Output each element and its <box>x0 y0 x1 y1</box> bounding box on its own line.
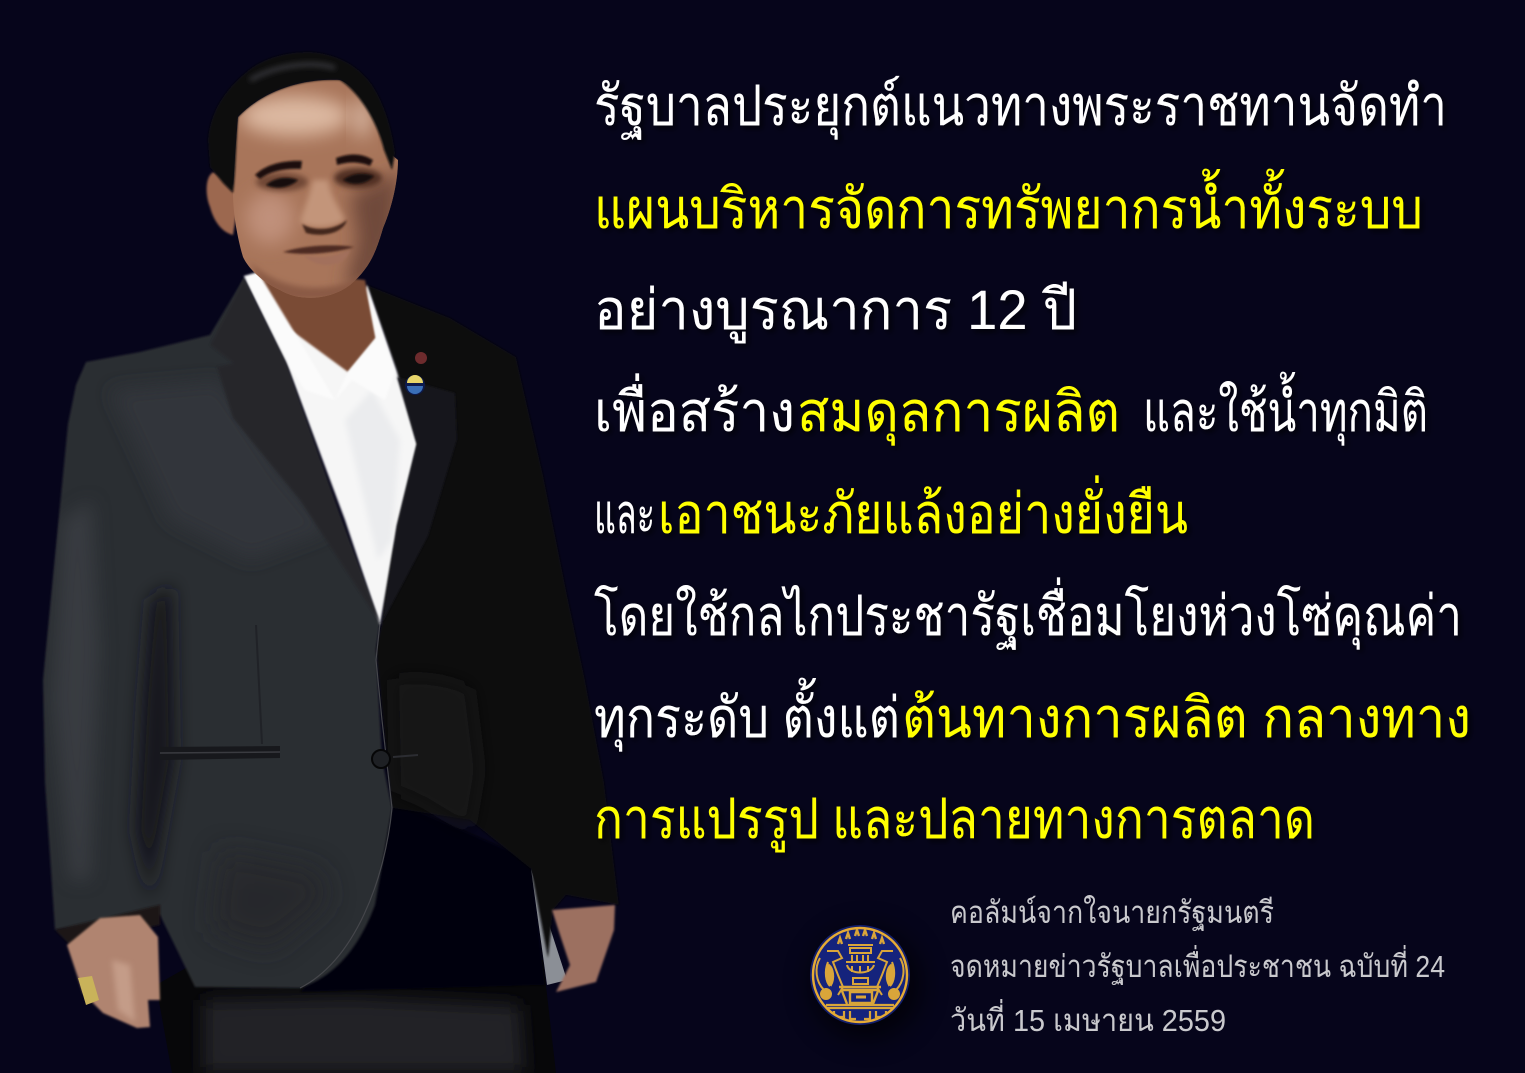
arm highlight <box>54 512 98 874</box>
line 5: และ <box>594 482 655 545</box>
source line 2: จดหมายข่าวรัฐบาลเพื่อประชาชน ฉบับที่ 24 <box>950 945 1445 985</box>
ring <box>78 976 99 1005</box>
collar left <box>244 272 335 400</box>
shadow under jacket <box>300 800 545 992</box>
source line 3: วันที่ 15 เมษายน 2559 <box>950 999 1226 1038</box>
hem edge <box>300 623 392 988</box>
right guardian <box>877 951 903 999</box>
chin shadow <box>252 266 350 298</box>
base band <box>826 1005 894 1019</box>
trousers <box>156 960 556 1073</box>
jacket left panel <box>43 278 392 988</box>
upper cheek <box>246 192 294 244</box>
right lapel <box>382 377 457 623</box>
hair shine <box>250 64 335 80</box>
line 7 <box>594 678 1471 752</box>
face base <box>233 80 398 298</box>
left guardian <box>817 951 843 999</box>
chest highlight <box>128 391 309 547</box>
seal artwork <box>817 930 903 1019</box>
line 4: และใช้น้ำทุกมิติ <box>1143 372 1428 446</box>
line 4 <box>594 372 1428 446</box>
headline text block <box>594 74 1471 853</box>
white shirt <box>244 276 417 625</box>
collar right <box>335 285 395 400</box>
pocket <box>160 746 280 760</box>
line 3: อย่างบูรณาการ 12 ปี <box>594 278 1077 344</box>
icon: government seal <box>810 925 920 1038</box>
line 4: สมดุลการผลิต <box>797 380 1120 446</box>
lining <box>531 869 567 985</box>
lower panel shade <box>210 850 330 950</box>
line 8: การแปรรูป และปลายทางการตลาด <box>594 787 1315 853</box>
left hand <box>67 915 160 1028</box>
mouth <box>283 245 354 254</box>
eyes <box>266 174 374 188</box>
right hand <box>552 905 615 992</box>
pocket line <box>160 752 280 753</box>
right shadow <box>345 170 400 290</box>
jacket right dark side <box>367 285 619 958</box>
line 4: เพื่อสร้าง <box>594 373 795 443</box>
nostril shadow <box>302 220 347 235</box>
source line 1: คอลัมน์จากใจนายกรัฐมนตรี <box>950 895 1274 931</box>
eyebrows <box>255 154 373 179</box>
right panel lighter patch <box>393 678 480 830</box>
ear <box>207 172 240 235</box>
trouser legs highlight <box>203 997 525 1073</box>
gap between arm and torso <box>135 585 175 900</box>
button hole <box>393 755 418 757</box>
photo: man in dark suit <box>43 52 619 1073</box>
knuckle shading <box>112 960 135 1022</box>
jacket button <box>372 750 390 768</box>
left cuff <box>55 905 160 945</box>
line 7: ทุกระดับ ตั้งแต่ <box>594 678 900 752</box>
line 7: ต้นทางการผลิต กลางทาง <box>902 686 1471 749</box>
source note <box>950 895 1445 1038</box>
pedestal <box>839 987 881 1004</box>
nose <box>300 180 345 227</box>
eye sockets <box>256 173 308 191</box>
dart seam <box>256 625 262 744</box>
neck <box>253 268 376 372</box>
hair <box>208 52 395 193</box>
left lapel <box>210 278 380 623</box>
jacket shading group <box>52 380 330 950</box>
flame row <box>838 930 884 944</box>
lower lip <box>303 250 350 265</box>
line 5: เอาชนะภัยแล้งอย่างยั่งยืน <box>658 475 1188 545</box>
face group <box>233 80 398 298</box>
line 2: แผนบริหารจัดการทรัพยากรน้ำทั้งระบบ <box>594 169 1423 240</box>
vase <box>846 945 875 984</box>
forehead right light <box>354 98 370 138</box>
lapel pins <box>405 352 427 395</box>
shirt folds <box>345 390 400 560</box>
forehead light <box>240 96 350 136</box>
pedestal star <box>856 996 866 998</box>
